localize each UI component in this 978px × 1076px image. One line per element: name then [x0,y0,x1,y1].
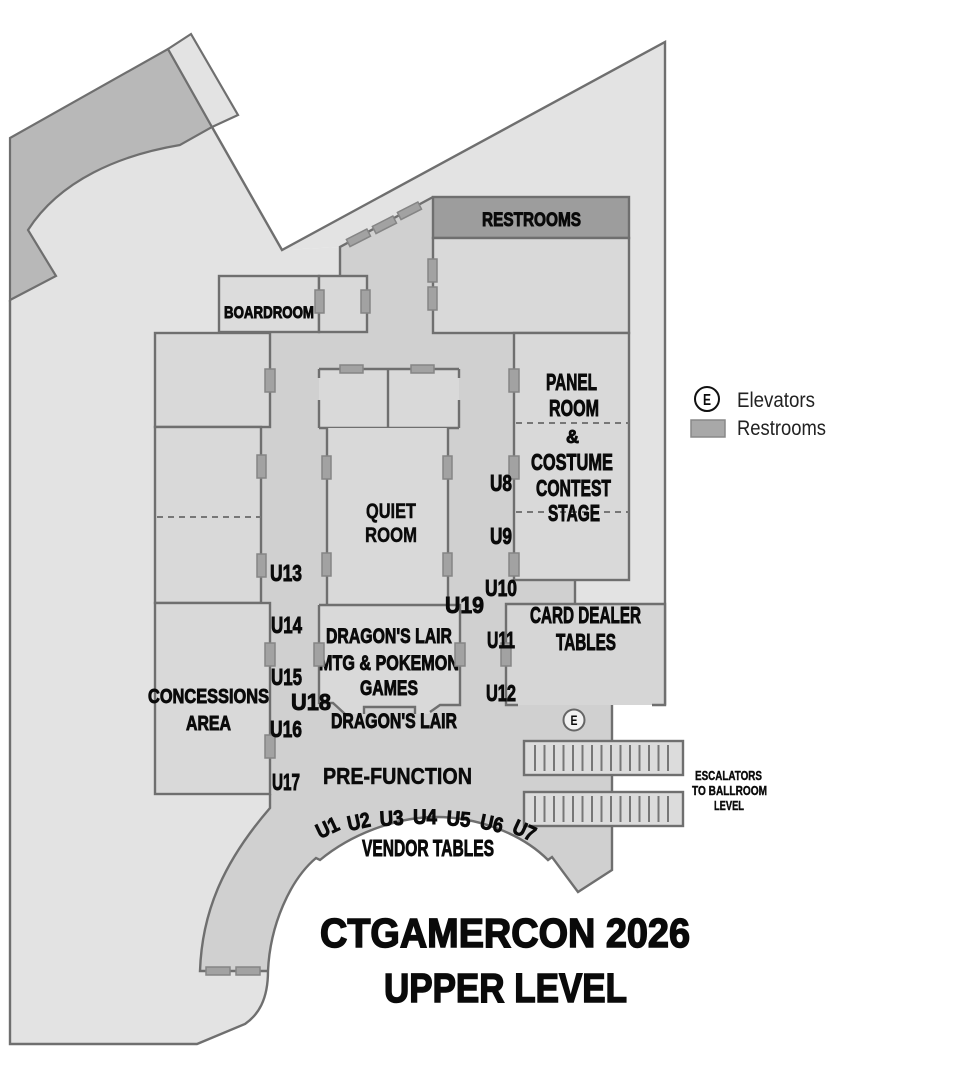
vendor numbers: U12 [486,680,516,706]
panel room: & [566,427,579,447]
vendor table labels: U5 [446,807,472,832]
vendor table labels [312,806,539,861]
vendor numbers: U13 [270,560,302,586]
legend [691,387,826,440]
boardroom: BOARDROOM [224,303,314,322]
title: CTGAMERCON 2026 [320,910,690,956]
icon: elevator on map: E [570,712,578,728]
vendor numbers: U17 [272,769,300,795]
quiet room: QUIET [366,500,416,523]
card dealer tables [506,580,665,705]
vendor numbers: U10 [485,575,517,601]
dragon's lair room [319,605,460,733]
vendor table labels: U7 [509,816,539,846]
panel room: COSTUME [531,449,613,475]
dragon's lair room: DRAGON'S LAIR [331,710,457,733]
vendor numbers: U8 [490,470,512,496]
north wing [10,34,238,300]
vendor numbers: U18 [291,689,331,715]
outer wall [212,42,665,705]
vendor numbers: U15 [271,664,302,690]
panel room: CONTEST [536,475,611,501]
card dealer tables: CARD DEALER [530,602,641,628]
vendor table labels: U3 [379,807,404,831]
vendor numbers: U9 [490,523,512,549]
panel room: STAGE [548,500,600,526]
title: UPPER LEVEL [384,965,627,1011]
escalator label: LEVEL [714,799,744,813]
escalators [524,705,683,826]
vendor numbers [270,470,517,795]
card dealer tables: TABLES [556,629,616,655]
vendor numbers: U16 [270,716,302,742]
escalator label: ESCALATORS [695,769,762,783]
vendor table labels: U2 [345,809,373,836]
vendor numbers: U14 [271,612,302,638]
quiet room: ROOM [365,524,417,547]
vendor table labels: U6 [478,810,505,838]
panel room: PANEL [546,369,597,395]
panel room: ROOM [549,395,599,421]
panel room [514,333,629,580]
concessions area [148,603,270,794]
legend: Restrooms [737,417,826,440]
vendor numbers: U11 [487,627,515,653]
pre-function label: PRE-FUNCTION [323,763,472,789]
vendor table labels: U1 [312,813,343,844]
legend: E [703,392,711,409]
concessions area: AREA [186,713,231,735]
left rooms [155,333,270,603]
concessions area: CONCESSIONS [148,686,269,708]
dragon's lair room: GAMES [360,677,418,700]
vendor numbers: U19 [445,592,484,618]
vendor table labels: VENDOR TABLES [362,835,494,861]
corridor floor [200,197,612,971]
dragon's lair room: DRAGON'S LAIR [326,625,452,648]
vendor table labels: U4 [413,806,437,829]
title [320,910,690,1011]
boardroom [219,197,433,332]
legend: Elevators [737,389,815,412]
icon: elevator on map [564,710,584,730]
quiet room [327,428,448,605]
restrooms block: RESTROOMS [482,210,581,231]
building exterior area [10,42,665,1044]
escalator label: TO BALLROOM [692,784,767,798]
escalator label [692,769,767,813]
doors [206,202,519,975]
restrooms block [433,197,629,333]
dragon's lair room: MTG & POKEMON [319,652,459,675]
small rooms above quiet room [319,369,459,428]
